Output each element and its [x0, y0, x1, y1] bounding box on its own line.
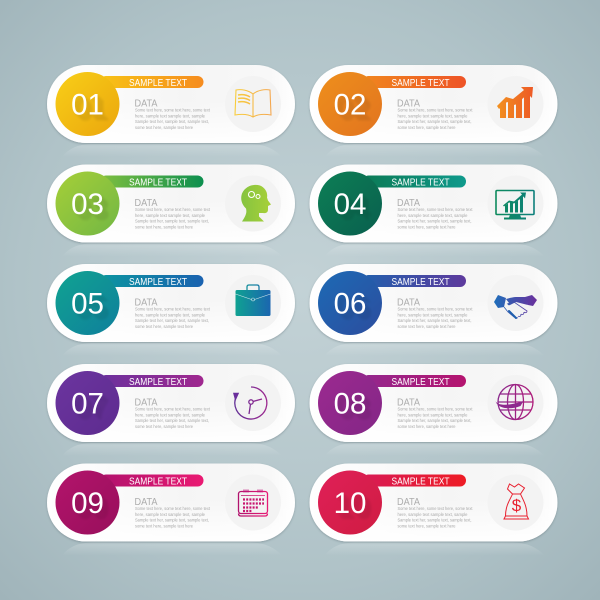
number 07: 07 — [71, 388, 104, 420]
text block: here, sample text sample text, sample — [398, 512, 468, 517]
text block: some text here, sample text here — [135, 324, 193, 329]
text block — [398, 207, 473, 230]
text block: Some text here, some text here, some text — [398, 407, 473, 412]
data heading: DATA — [397, 398, 420, 408]
number 09: 09 — [71, 487, 104, 520]
text block: Sample text her, sample text, sample text, — [135, 418, 209, 423]
icon: globe — [496, 384, 533, 420]
icon: money bag — [504, 484, 528, 519]
heading bar text: SAMPLE TEXT — [129, 377, 187, 388]
text block: Sample text her, sample text, sample text, — [398, 318, 472, 323]
text block: Sample text her, sample text, sample text, — [135, 518, 209, 523]
data heading: DATA — [134, 98, 158, 110]
heading bar text: SAMPLE TEXT — [392, 476, 450, 488]
text block: some text here, sample text here — [398, 125, 456, 130]
text block: some text here, sample text here — [398, 424, 456, 429]
text block: Some text here, some text here, some text — [398, 207, 473, 212]
text block: here, sample text sample text, sample — [135, 412, 205, 418]
panel: card 09 — [47, 464, 295, 556]
icon: head with gears — [241, 185, 271, 222]
data heading: DATA — [397, 198, 420, 209]
number 10: 10 — [334, 487, 366, 520]
text block: Sample text her, sample text, sample text, — [135, 318, 209, 323]
text block — [398, 506, 473, 528]
icon: open book — [235, 90, 271, 117]
text block — [135, 506, 211, 528]
text block: Some text here, some text here, some text — [135, 207, 211, 212]
text block: Sample text her, sample text, sample text, — [398, 219, 472, 224]
text block: Some text here, some text here, some text — [398, 307, 473, 312]
text block: here, sample text sample text, sample — [135, 114, 205, 118]
panel: card 10 — [310, 464, 558, 556]
text block: some text here, sample text here — [398, 324, 456, 329]
panel: card 03 — [47, 164, 295, 256]
data heading: DATA — [134, 298, 158, 308]
text block: Some text here, some text here, some text — [135, 307, 211, 312]
panel: card 07 — [47, 364, 295, 456]
text block: here, sample text sample text, sample — [398, 412, 468, 418]
text block: Some text here, some text here, some text — [135, 407, 211, 412]
text block: some text here, sample text here — [135, 125, 193, 130]
data heading: DATA — [134, 398, 158, 408]
heading bar text: SAMPLE TEXT — [129, 476, 187, 488]
icon: clock with arrow — [234, 387, 267, 419]
number 05: 05 — [71, 288, 104, 320]
heading bar text: SAMPLE TEXT — [392, 377, 450, 388]
heading bar text: SAMPLE TEXT — [392, 277, 450, 288]
text block: Some text here, some text here, some text — [398, 506, 473, 511]
text block: Sample text her, sample text, sample text, — [135, 119, 209, 124]
text block: here, sample text sample text, sample — [398, 312, 468, 318]
text block: here, sample text sample text, sample — [398, 114, 468, 118]
number 02: 02 — [334, 88, 366, 122]
heading bar text: SAMPLE TEXT — [392, 78, 450, 89]
number 06: 06 — [334, 288, 366, 320]
panel: card 05 — [47, 264, 295, 356]
heading bar text: SAMPLE TEXT — [129, 78, 187, 89]
panel: card 06 — [310, 264, 558, 356]
text block — [398, 307, 473, 329]
text block: Some text here, some text here, some text — [135, 108, 211, 113]
heading bar text: SAMPLE TEXT — [129, 277, 187, 288]
text block: here, sample text sample text, sample — [135, 312, 205, 318]
text block — [398, 407, 473, 429]
text block: Sample text her, sample text, sample text, — [398, 418, 472, 423]
text block: here, sample text sample text, sample — [135, 213, 205, 218]
panel: card 01 — [47, 65, 295, 157]
data heading: DATA — [397, 497, 420, 508]
number 03: 03 — [71, 188, 104, 221]
text block: here, sample text sample text, sample — [398, 213, 468, 218]
text block: Sample text her, sample text, sample text, — [398, 518, 472, 523]
text block: some text here, sample text here — [398, 524, 456, 528]
icon: growth chart — [497, 87, 533, 118]
panel: card 04 — [310, 164, 558, 256]
heading bar text: SAMPLE TEXT — [392, 178, 450, 188]
icon: handshake — [494, 295, 537, 318]
icon: calendar — [238, 490, 268, 516]
heading bar text: SAMPLE TEXT — [129, 178, 187, 188]
icon: briefcase — [236, 285, 270, 316]
text block: Some text here, some text here, some text — [135, 506, 211, 511]
text block: here, sample text sample text, sample — [135, 512, 205, 517]
text block — [398, 108, 473, 130]
data heading: DATA — [134, 198, 158, 209]
number 04: 04 — [334, 188, 366, 221]
text block: some text here, sample text here — [135, 224, 193, 230]
text block: Sample text her, sample text, sample text, — [135, 219, 209, 224]
text block: Some text here, some text here, some text — [398, 108, 473, 113]
panel: card 02 — [310, 65, 558, 157]
data heading: DATA — [397, 98, 420, 110]
text block: some text here, sample text here — [135, 424, 193, 429]
data heading: DATA — [134, 497, 158, 508]
text block — [135, 307, 211, 329]
text block — [135, 407, 211, 429]
text block: some text here, sample text here — [135, 524, 193, 528]
text block: some text here, sample text here — [398, 224, 456, 230]
text block — [135, 207, 211, 230]
icon: monitor with chart — [496, 190, 534, 220]
data heading: DATA — [397, 298, 420, 308]
number 08: 08 — [334, 388, 366, 420]
text block: Sample text her, sample text, sample text, — [398, 119, 472, 124]
icon: money bag: $ — [512, 496, 522, 515]
number 01: 01 — [71, 88, 104, 122]
text block — [135, 108, 211, 130]
panel: card 08 — [310, 364, 558, 456]
